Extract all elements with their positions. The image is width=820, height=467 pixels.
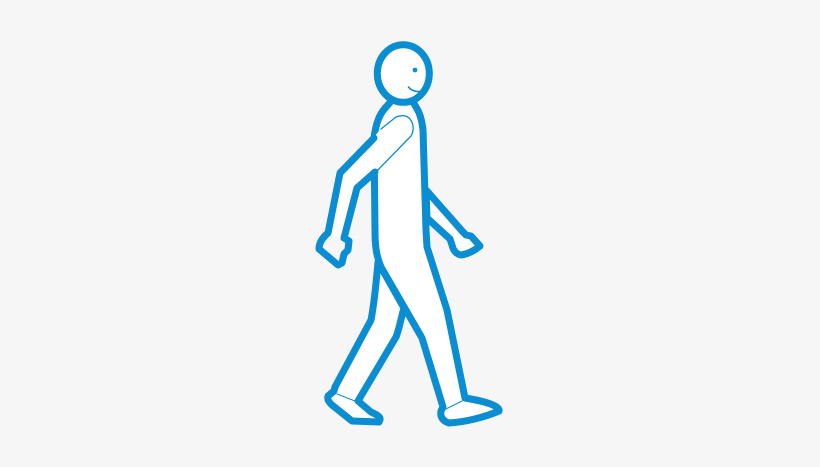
eye — [413, 68, 417, 72]
head — [377, 45, 429, 102]
torso and front leg — [374, 100, 499, 423]
back leg — [328, 262, 404, 422]
front arm — [319, 138, 375, 265]
back foot crease — [337, 394, 355, 401]
smile — [408, 87, 422, 92]
back arm — [426, 190, 480, 255]
upper arm outline — [376, 116, 413, 172]
front foot crease — [446, 401, 462, 409]
arm fill patch — [331, 116, 412, 240]
